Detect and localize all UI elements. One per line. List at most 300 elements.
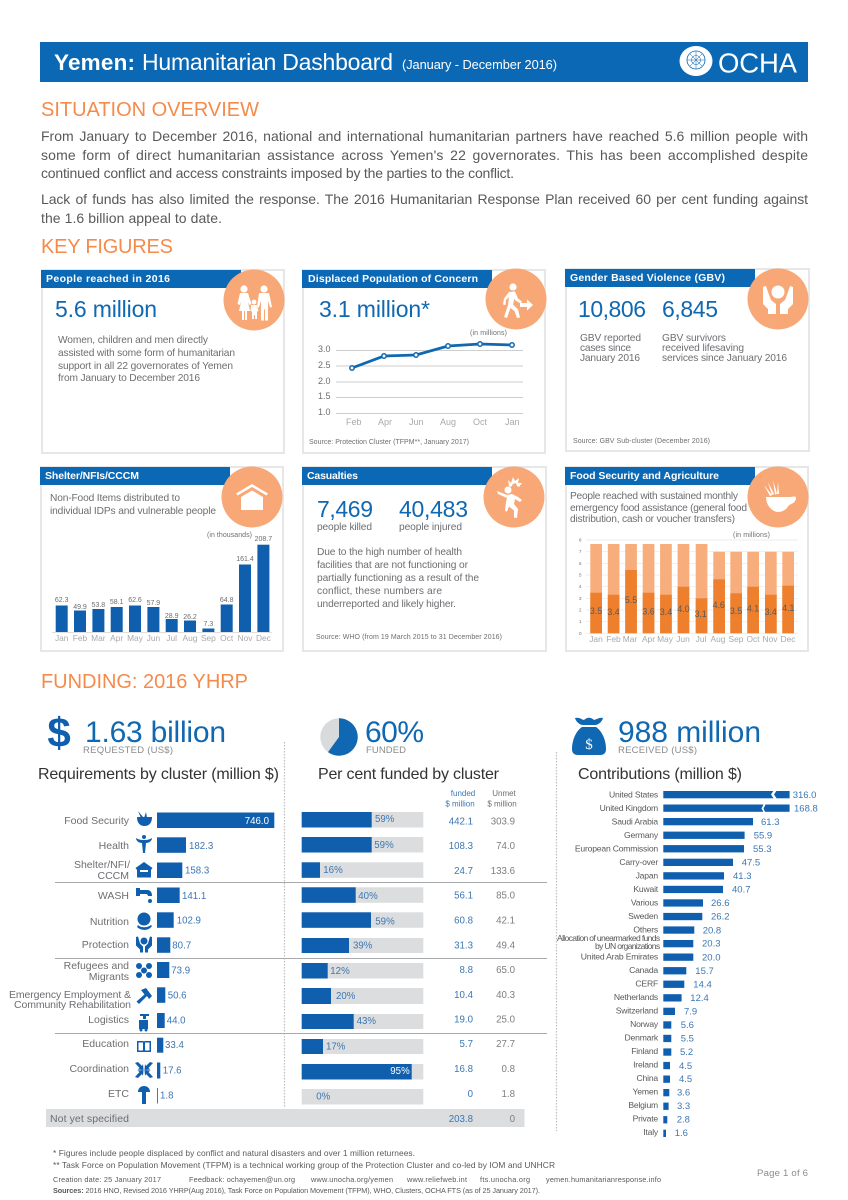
bar chart: contributions: United States bbox=[609, 790, 658, 800]
bar chart: nfis distributed: Nov bbox=[238, 633, 253, 643]
stacked bar chart: food assistance: Jul bbox=[696, 634, 706, 644]
bar chart: nfis distributed: (in thousands) bbox=[207, 532, 252, 539]
bar chart: requirements by cluster: Refugees and bbox=[64, 960, 129, 972]
table: funded and unmet: 27.7 bbox=[496, 1039, 515, 1050]
header banner: Yemen: bbox=[54, 50, 135, 75]
bar chart: contributions: European Commission bbox=[575, 844, 658, 854]
bar chart: contributions bbox=[557, 790, 818, 1139]
text: gbv reported: GBV reported bbox=[580, 333, 641, 344]
bar chart: contributions: Others bbox=[633, 924, 658, 934]
bar chart: contributions: Japan bbox=[636, 870, 658, 880]
text: casualties description: Due to the high number of health bbox=[317, 547, 462, 558]
bar chart: requirements by cluster: Migrants bbox=[89, 971, 129, 983]
bar chart: requirements by cluster: ETC bbox=[108, 1088, 129, 1100]
icon: protective hands bbox=[748, 268, 808, 330]
footnotes: Creation date: 25 January 2017 bbox=[53, 1175, 161, 1184]
stacked bar chart: food assistance: 3.5 bbox=[730, 606, 742, 616]
text: gbv survivors: GBV survivors bbox=[662, 333, 726, 344]
bar chart: contributions: 4.5 bbox=[679, 1074, 692, 1085]
table: funded and unmet: 5.7 bbox=[460, 1039, 473, 1050]
panel: gender based violence: 10,806 bbox=[578, 296, 646, 322]
bar chart: contributions: 5.2 bbox=[680, 1047, 693, 1058]
line chart: displaced population: Oct bbox=[473, 417, 488, 427]
line chart: displaced population bbox=[318, 330, 523, 427]
bar chart: requirements by cluster: Logistics bbox=[88, 1014, 129, 1026]
stacked bar chart: food assistance: Jun bbox=[676, 634, 690, 644]
situation overview text: continued conflict and access constraints imposed by the parties to the conflict. bbox=[41, 165, 514, 181]
bar chart: contributions: by UN organizations bbox=[595, 941, 660, 951]
icon: logistics bbox=[139, 1014, 149, 1032]
text: casualties description: partially functioning as a result of the bbox=[317, 573, 479, 584]
stacked bar chart: food assistance: 3.6 bbox=[642, 606, 655, 616]
header banner bbox=[40, 42, 808, 82]
stacked bar chart: food assistance: 3 bbox=[579, 596, 582, 601]
bar chart: contributions: Canada bbox=[629, 965, 658, 975]
bar chart: requirements by cluster: 182.3 bbox=[189, 841, 213, 852]
icon: bowl with wheat bbox=[748, 466, 808, 528]
bar chart: contributions: 20.3 bbox=[702, 938, 720, 950]
table: funded and unmet: 16.8 bbox=[454, 1064, 473, 1075]
heading: key figures: KEY FIGURES bbox=[41, 236, 173, 258]
bar chart: requirements by cluster: 1.8 bbox=[160, 1090, 173, 1102]
bar chart: contributions: 20.8 bbox=[703, 926, 721, 936]
panel: gender based violence bbox=[565, 268, 809, 451]
bar chart: contributions: 3.6 bbox=[677, 1088, 690, 1098]
table: funded and unmet: 65.0 bbox=[496, 965, 516, 976]
column dividers bbox=[284, 742, 556, 1131]
bar chart: nfis distributed: May bbox=[127, 633, 144, 643]
stacked bar chart: food assistance: 5.5 bbox=[625, 595, 637, 605]
bar chart: requirements by cluster: WASH bbox=[98, 890, 129, 902]
bar chart: nfis distributed: 161.4 bbox=[236, 556, 254, 563]
bar chart: contributions: 12.4 bbox=[690, 993, 709, 1004]
bar chart: requirements by cluster: Education bbox=[82, 1038, 129, 1050]
bar chart: requirements by cluster: Protection bbox=[82, 939, 129, 951]
table: funded and unmet: $ million bbox=[445, 800, 475, 808]
bar chart: nfis distributed: Sep bbox=[201, 633, 216, 643]
chart: per cent funded by cluster: 20% bbox=[336, 991, 356, 1002]
panel: people reached bbox=[41, 270, 284, 453]
bar chart: contributions: Kuwait bbox=[633, 884, 659, 894]
table: funded and unmet: $ million bbox=[487, 800, 517, 808]
footnotes: www.unocha.org/yemen bbox=[310, 1175, 393, 1184]
not yet specified row: Not yet specified bbox=[50, 1113, 129, 1125]
bar chart: contributions: Netherlands bbox=[614, 992, 658, 1002]
heading: funding: FUNDING: 2016 YHRP bbox=[41, 671, 248, 693]
logo: OCHA: OCHA bbox=[718, 48, 798, 78]
cluster icons bbox=[135, 811, 153, 1104]
bar chart: contributions: CERF bbox=[635, 978, 658, 988]
chart: per cent funded by cluster: 95% bbox=[390, 1066, 410, 1077]
page number: Page 1 of 6 bbox=[757, 1168, 808, 1179]
table: funded and unmet: 24.7 bbox=[454, 866, 473, 877]
table: funded and unmet: 31.3 bbox=[454, 940, 473, 952]
footnotes: fts.unocha.org bbox=[480, 1175, 530, 1184]
bar chart: nfis distributed: 62.6 bbox=[128, 597, 142, 604]
panel: displaced population: 3.1 million* bbox=[319, 296, 430, 322]
bar chart: contributions: 55.9 bbox=[754, 830, 772, 842]
stacked bar chart: food assistance: 4.6 bbox=[713, 600, 725, 610]
panel: gender based violence: Gender Based Violence (GBV) bbox=[570, 272, 725, 284]
panel: food security and agriculture bbox=[565, 466, 808, 651]
line chart: displaced population: Jan bbox=[505, 417, 520, 427]
text: casualties description: facilities that are not functioning or bbox=[317, 560, 469, 571]
bar chart: requirements by cluster: 73.9 bbox=[171, 966, 190, 976]
bar chart: contributions: 14.4 bbox=[693, 980, 712, 990]
bar chart: requirements by cluster: Shelter/NFI/ bbox=[74, 859, 130, 871]
heading: per cent funded by cluster: Per cent funded by cluster bbox=[318, 766, 500, 783]
bar chart: nfis distributed: Jun bbox=[147, 633, 160, 643]
text: gbv survivors bbox=[662, 333, 787, 364]
icon: shelter bbox=[136, 862, 152, 878]
bar chart: requirements by cluster: Food Security bbox=[64, 815, 130, 827]
line chart: displaced population: 3.0 bbox=[318, 344, 331, 354]
text: people reached description bbox=[58, 335, 235, 384]
bar chart: nfis distributed: 28.9 bbox=[165, 613, 179, 620]
icon: refugees and migrants bbox=[136, 963, 152, 978]
line chart: displaced population: 2.5 bbox=[318, 360, 331, 370]
bar chart: requirements by cluster: 80.7 bbox=[172, 940, 191, 952]
bar chart: contributions: 47.5 bbox=[742, 858, 760, 868]
table: funded and unmet: 108.3 bbox=[449, 841, 473, 852]
stacked bar chart: food assistance: 3.4 bbox=[660, 607, 672, 617]
stacked bar chart: food assistance: Feb bbox=[606, 634, 621, 644]
panel: gender based violence: Source: GBV Sub-cluster (December 2016) bbox=[573, 438, 710, 445]
stacked bar chart: food assistance: Jan bbox=[589, 634, 603, 644]
stacked bar chart: food assistance: Oct bbox=[746, 634, 760, 644]
icon: education bbox=[137, 1041, 151, 1052]
bar chart: contributions: Switzerland bbox=[616, 1006, 658, 1016]
table: funded and unmet: 25.0 bbox=[496, 1014, 516, 1026]
icon: coordination bbox=[135, 1062, 153, 1078]
stacked bar chart: food assistance: 3.4 bbox=[765, 607, 777, 617]
headline: funded: 60% bbox=[365, 716, 424, 749]
footnotes: * Figures include people displaced by conflict and natural disasters and over 1 million returnees. bbox=[53, 1148, 415, 1158]
bar chart: contributions: United Arab Emirates bbox=[581, 952, 658, 962]
text: gbv reported: cases since bbox=[580, 343, 631, 354]
bar chart: contributions: 3.3 bbox=[677, 1101, 690, 1112]
table: funded and unmet: 60.8 bbox=[454, 916, 473, 926]
chart: per cent funded by cluster: 43% bbox=[357, 1016, 376, 1027]
chart: per cent funded by cluster: 59% bbox=[375, 814, 395, 825]
panel: casualties: people injured bbox=[399, 522, 462, 533]
icon: dollar sign: $ bbox=[47, 709, 71, 756]
icon: nutrition bbox=[137, 912, 152, 930]
situation overview text: Lack of funds has also limited the response. The 2016 Humanitarian Response Plan received 60 per cent funding against bbox=[41, 191, 808, 207]
headline: requested bbox=[47, 709, 226, 756]
bar chart: contributions: Carry-over bbox=[619, 857, 658, 867]
bar chart: nfis distributed: 53.8 bbox=[92, 602, 105, 609]
stacked bar chart: food assistance: Dec bbox=[781, 634, 795, 644]
stacked bar chart: food assistance: Apr bbox=[642, 634, 655, 644]
panel: food security and agriculture: Food Security and Agriculture bbox=[570, 470, 719, 482]
bar chart: requirements by cluster: 102.9 bbox=[177, 916, 201, 926]
stacked bar chart: food assistance: 3.5 bbox=[590, 606, 602, 616]
bar chart: nfis distributed: 7.3 bbox=[204, 621, 213, 628]
line chart: displaced population: Apr bbox=[378, 417, 392, 427]
stacked bar chart: food assistance: 4.0 bbox=[677, 604, 690, 614]
bar chart: contributions: Ireland bbox=[633, 1060, 658, 1070]
bar chart: requirements by cluster: 141.1 bbox=[182, 891, 206, 902]
group separators bbox=[55, 882, 547, 1034]
footnotes: yemen.humanitarianresponse.info bbox=[546, 1175, 661, 1184]
headline: received: 988 million bbox=[618, 716, 761, 749]
text: shelter description: individual IDPs and vulnerable people bbox=[50, 506, 216, 517]
chart: per cent funded by cluster: 40% bbox=[358, 891, 378, 902]
text: gbv reported bbox=[580, 333, 641, 364]
bar chart: requirements by cluster: Health bbox=[99, 840, 129, 852]
table: funded and unmet: 56.1 bbox=[454, 890, 473, 902]
bar chart: contributions: Yemen bbox=[633, 1086, 658, 1096]
table: funded and unmet: funded bbox=[451, 789, 475, 798]
stacked bar chart: food assistance: 8 bbox=[579, 538, 582, 542]
panel: shelter nfis cccm: Shelter/NFIs/CCCM bbox=[45, 470, 139, 482]
logo: OCHA bbox=[680, 46, 798, 78]
stacked bar chart: food assistance: Sep bbox=[729, 634, 744, 644]
bar chart: nfis distributed: 26.2 bbox=[183, 614, 197, 621]
bar chart: contributions: 168.8 bbox=[794, 804, 818, 814]
bar chart: nfis distributed bbox=[52, 532, 272, 643]
bar chart: nfis distributed: Jan bbox=[55, 633, 69, 643]
panel: casualties: Casualties bbox=[307, 470, 358, 482]
stacked bar chart: food assistance: 4 bbox=[579, 584, 582, 589]
bar chart: requirements by cluster: 33.4 bbox=[165, 1040, 184, 1051]
chart: per cent funded by cluster: 17% bbox=[326, 1042, 346, 1052]
chart: per cent funded by cluster: 0% bbox=[316, 1092, 331, 1102]
stacked bar chart: food assistance: 0 bbox=[579, 631, 582, 636]
bar chart: contributions: Various bbox=[631, 898, 658, 908]
table: funded and unmet: 40.3 bbox=[496, 990, 515, 1001]
stacked bar chart: food assistance: 3.4 bbox=[607, 607, 620, 617]
bar chart: contributions: Italy bbox=[643, 1127, 659, 1137]
bar chart: contributions: 4.5 bbox=[679, 1061, 692, 1072]
stacked bar chart: food assistance: 5 bbox=[579, 572, 582, 578]
text: gbv survivors: received lifesaving bbox=[662, 343, 744, 354]
bar chart: requirements by cluster: CCCM bbox=[98, 870, 129, 882]
text: people reached description: support in all 22 governorates of Yemen bbox=[58, 361, 233, 372]
text: food description: distribution, cash or voucher transfers) bbox=[570, 514, 735, 525]
footnotes: www.reliefweb.int bbox=[406, 1175, 467, 1184]
situation overview text: From January to December 2016, national and international humanitarian partners have reached 5.6 million people with bbox=[41, 128, 808, 144]
stacked bar chart: food assistance: 1 bbox=[579, 619, 582, 624]
stacked bar chart: food assistance: 6 bbox=[579, 561, 582, 566]
bar chart: nfis distributed: 64.8 bbox=[220, 597, 234, 604]
bar chart: contributions: 15.7 bbox=[695, 966, 714, 977]
bar chart: requirements by cluster: Emergency Employment & bbox=[9, 989, 131, 1001]
bar chart: contributions: 41.3 bbox=[733, 871, 752, 882]
stacked bar chart: food assistance: 4.1 bbox=[782, 603, 795, 613]
line chart: displaced population: 1.5 bbox=[318, 391, 331, 401]
bar chart: nfis distributed: Feb bbox=[73, 633, 88, 643]
panel: shelter nfis cccm bbox=[40, 466, 283, 651]
table: funded and unmet: 133.6 bbox=[491, 866, 515, 877]
chart: per cent funded by cluster: 59% bbox=[374, 840, 394, 851]
situation overview text bbox=[41, 128, 808, 226]
icon: health bbox=[136, 835, 152, 853]
icon: family bbox=[224, 270, 284, 330]
icon: house bbox=[222, 466, 282, 528]
chart: per cent funded by cluster: 16% bbox=[323, 865, 343, 876]
stacked bar chart: food assistance: 4.1 bbox=[747, 604, 759, 614]
table: funded and unmet: 42.1 bbox=[496, 916, 515, 926]
text: casualties description: conflict, these numbers are bbox=[317, 586, 442, 597]
bar chart: contributions: 5.5 bbox=[681, 1034, 694, 1044]
stacked bar chart: food assistance bbox=[579, 532, 798, 644]
heading: situation overview: SITUATION OVERVIEW bbox=[41, 99, 259, 121]
bar chart: requirements by cluster: 50.6 bbox=[168, 990, 187, 1002]
line chart: displaced population: 1.0 bbox=[318, 407, 331, 417]
header banner: (January - December 2016) bbox=[402, 57, 557, 72]
table: funded and unmet bbox=[445, 789, 517, 1100]
footnotes: Feedback: ochayemen@un.org bbox=[189, 1175, 295, 1184]
chart: per cent funded by cluster: 39% bbox=[353, 940, 373, 952]
stacked bar chart: food assistance: 3.1 bbox=[695, 609, 707, 619]
header banner: Humanitarian Dashboard bbox=[142, 49, 393, 75]
icon: wash bbox=[136, 888, 152, 903]
bar chart: contributions: Finland bbox=[631, 1046, 658, 1056]
table: funded and unmet: 8.8 bbox=[460, 965, 473, 976]
stacked bar chart: food assistance: 2 bbox=[579, 608, 582, 612]
situation overview text: some form of direct humanitarian assistance across Yemen's 22 governorates. This has been accomplished despite bbox=[41, 147, 808, 163]
bar chart: requirements by cluster: 746.0 bbox=[245, 816, 270, 827]
stacked bar chart: food assistance: Mar bbox=[623, 634, 637, 644]
bar chart: contributions: 26.6 bbox=[711, 898, 730, 909]
bar chart: nfis distributed: Apr bbox=[110, 633, 123, 643]
bar chart: contributions: 5.6 bbox=[681, 1020, 694, 1031]
bar chart: requirements by cluster: 44.0 bbox=[167, 1016, 186, 1026]
heading: contributions: Contributions (million $) bbox=[578, 766, 742, 783]
line chart: displaced population: 2.0 bbox=[318, 376, 331, 386]
icon: money bag bbox=[572, 718, 606, 755]
text: shelter description: Non-Food Items distributed to bbox=[50, 493, 180, 504]
bar chart: contributions: 61.3 bbox=[761, 817, 780, 828]
bar chart: contributions: Germany bbox=[624, 830, 659, 840]
line chart: displaced population: Jun bbox=[409, 417, 424, 427]
bar chart: requirements by cluster: Community Rehabilitation bbox=[14, 999, 131, 1011]
bar chart: contributions: 2.8 bbox=[677, 1114, 690, 1126]
bar chart: requirements by cluster: 158.3 bbox=[185, 866, 209, 876]
bar chart: contributions: Belgium bbox=[628, 1100, 658, 1110]
situation overview text: the 1.6 billion appeal to date. bbox=[41, 210, 222, 226]
panel: people reached: 5.6 million bbox=[55, 296, 157, 322]
icon: money bag: $ bbox=[585, 737, 593, 753]
headline: funded: FUNDED bbox=[366, 745, 406, 756]
bar chart: nfis distributed: Mar bbox=[91, 633, 106, 643]
stacked bar chart: food assistance: May bbox=[657, 634, 674, 644]
bar chart: nfis distributed: Jul bbox=[166, 633, 177, 643]
bar chart: contributions: 20.0 bbox=[702, 952, 720, 964]
headline: received bbox=[572, 716, 761, 756]
chart: per cent funded by cluster: 59% bbox=[375, 916, 395, 928]
bar chart: nfis distributed: Dec bbox=[256, 633, 271, 643]
bar chart: requirements by cluster bbox=[9, 812, 274, 1104]
bar chart: requirements by cluster: Nutrition bbox=[90, 916, 129, 928]
table: funded and unmet: 303.9 bbox=[491, 816, 515, 828]
bar chart: nfis distributed: 58.1 bbox=[110, 599, 124, 606]
footnotes bbox=[53, 1148, 661, 1195]
panel: displaced population: Displaced Population of Concern bbox=[308, 273, 478, 285]
stacked bar chart: food assistance: (in millions) bbox=[733, 532, 770, 539]
text: gbv reported: January 2016 bbox=[580, 353, 640, 364]
stacked bar chart: food assistance: 7 bbox=[579, 549, 582, 554]
text: food description bbox=[570, 491, 747, 525]
text: casualties description bbox=[317, 547, 479, 610]
panel: casualties: 40,483 bbox=[399, 496, 468, 522]
not yet specified row: 203.8 bbox=[449, 1114, 473, 1125]
heading: requirements by cluster: Requirements by cluster (million $) bbox=[38, 766, 279, 783]
bar chart: requirements by cluster: 17.6 bbox=[163, 1066, 182, 1076]
bar chart: contributions: 26.2 bbox=[711, 912, 730, 922]
panel: displaced population: Source: Protection Cluster (TFPM**, January 2017) bbox=[309, 439, 469, 446]
icon: hammer bbox=[136, 988, 152, 1004]
bar chart: contributions: 55.3 bbox=[753, 844, 772, 855]
panel: casualties: 7,469 bbox=[317, 496, 373, 522]
bar chart: nfis distributed: 62.3 bbox=[55, 597, 69, 604]
table: funded and unmet: 19.0 bbox=[454, 1014, 474, 1026]
table: funded and unmet: 0 bbox=[468, 1089, 474, 1100]
bar chart: contributions: China bbox=[637, 1073, 658, 1083]
stacked bar chart: food assistance: Aug bbox=[711, 634, 726, 644]
panel: displaced population bbox=[302, 268, 546, 453]
table: funded and unmet: 0.8 bbox=[502, 1064, 515, 1075]
headline: requested: REQUESTED (US$) bbox=[83, 745, 173, 756]
text: food description: emergency food assistance (general food bbox=[570, 503, 747, 514]
table: funded and unmet: 85.0 bbox=[496, 890, 516, 902]
not yet specified row bbox=[46, 1109, 524, 1127]
not yet specified row: 0 bbox=[510, 1114, 516, 1125]
headline: requested: 1.63 billion bbox=[85, 716, 226, 749]
table: funded and unmet: 49.4 bbox=[496, 940, 516, 952]
text: shelter description bbox=[50, 493, 216, 517]
panel: people reached: People reached in 2016 bbox=[46, 273, 170, 285]
text: casualties description: underreported and likely higher. bbox=[317, 599, 456, 610]
bar chart: nfis distributed: 208.7 bbox=[255, 536, 272, 543]
icon: protection bbox=[136, 936, 152, 952]
stacked bar chart: food assistance: Nov bbox=[763, 634, 778, 644]
bar chart: contributions: 316.0 bbox=[793, 790, 816, 801]
bar chart: contributions: Private bbox=[633, 1114, 658, 1124]
bar chart: contributions: Denmark bbox=[625, 1032, 659, 1042]
line chart: displaced population: (in millions) bbox=[470, 330, 507, 337]
bar chart: nfis distributed: Aug bbox=[183, 633, 198, 643]
bar chart: nfis distributed: 57.9 bbox=[147, 600, 160, 607]
bar chart: nfis distributed: 49.9 bbox=[73, 604, 87, 611]
bar chart: contributions: 40.7 bbox=[732, 884, 750, 896]
bar chart: contributions: 7.9 bbox=[684, 1006, 697, 1018]
icon: pie 60 per cent bbox=[320, 718, 358, 756]
table: funded and unmet: 1.8 bbox=[502, 1089, 515, 1100]
text: gbv survivors: services since January 2016 bbox=[662, 353, 787, 364]
headline: funded bbox=[320, 716, 424, 756]
panel: gender based violence: 6,845 bbox=[662, 296, 718, 322]
panel: casualties: people killed bbox=[317, 522, 372, 533]
icon: injured person bbox=[484, 466, 544, 528]
text: people reached description: Women, children and men directly bbox=[58, 335, 209, 346]
table: funded and unmet: Unmet bbox=[492, 789, 517, 798]
panel: casualties: Source: WHO (from 19 March 2015 to 31 December 2016) bbox=[316, 634, 502, 641]
icon: etc bbox=[138, 1086, 150, 1104]
table: funded and unmet: 74.0 bbox=[496, 841, 516, 852]
headline: received: RECEIVED (US$) bbox=[618, 745, 697, 756]
chart: per cent funded by cluster bbox=[302, 812, 423, 1104]
bar chart: contributions: 1.6 bbox=[675, 1128, 688, 1139]
footnotes: ** Task Force on Population Movement (TFPM) is a technical working group of the Protection Cluster and co-led by IOM and UNHCR bbox=[53, 1160, 555, 1170]
bar chart: requirements by cluster: Coordination bbox=[69, 1063, 129, 1075]
bar chart: nfis distributed: Oct bbox=[220, 633, 234, 643]
bar chart: contributions: United Kingdom bbox=[600, 803, 658, 813]
text: people reached description: assisted with some form of humanitarian bbox=[58, 348, 235, 359]
table: funded and unmet: 10.4 bbox=[454, 990, 474, 1001]
